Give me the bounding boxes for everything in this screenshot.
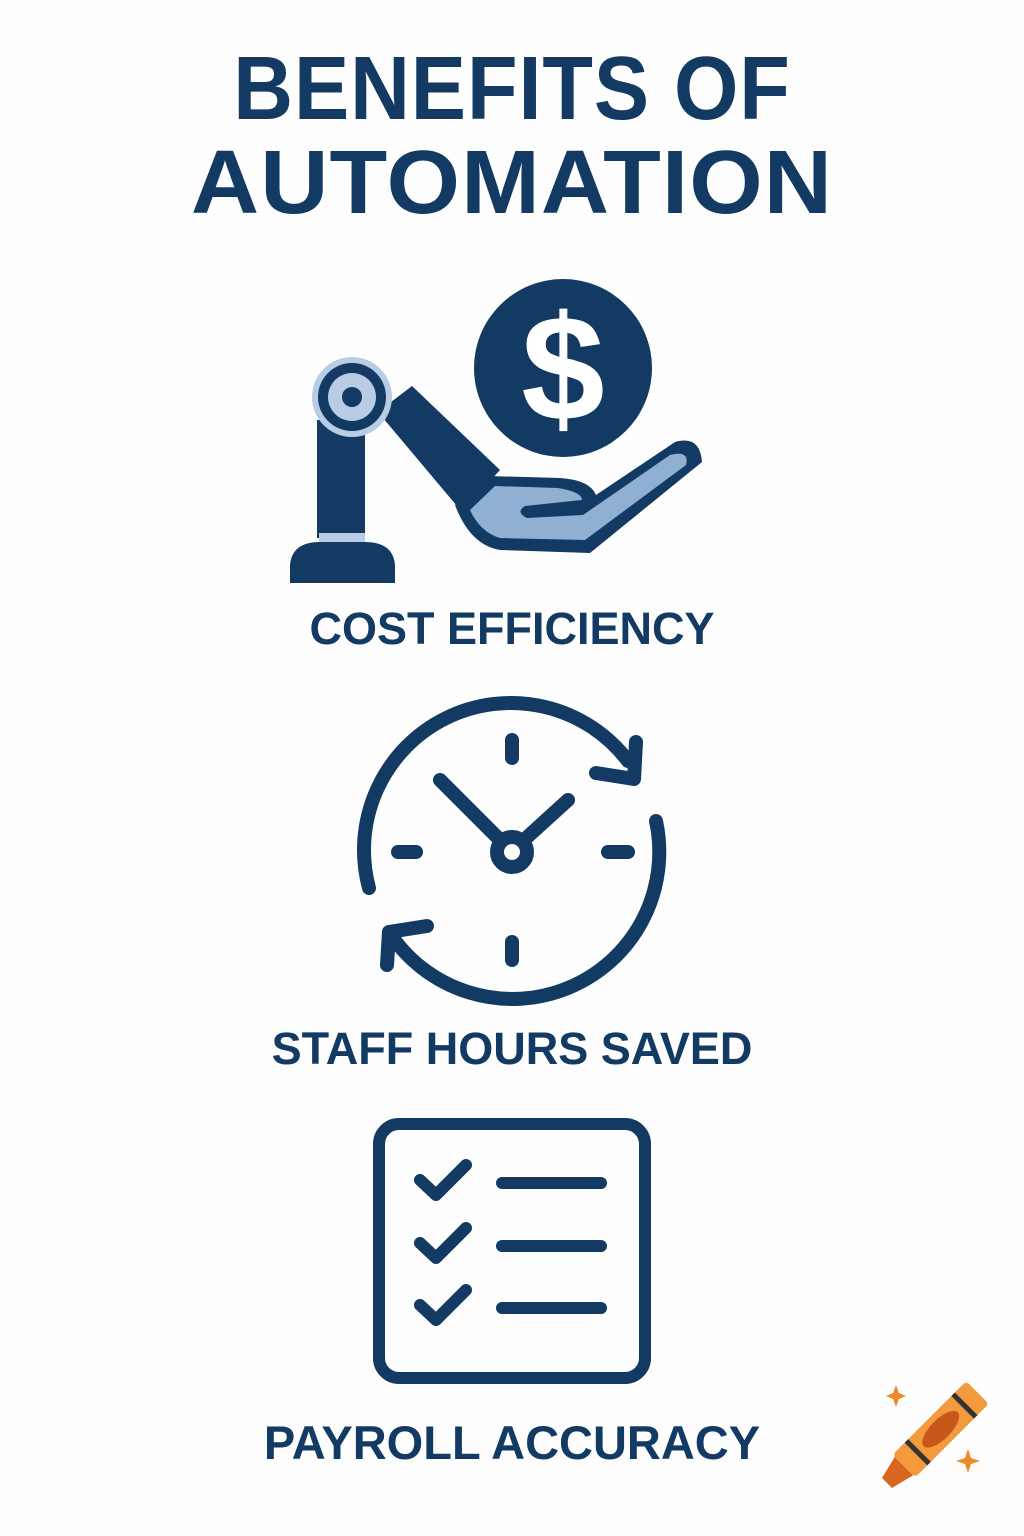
title (191, 39, 833, 233)
icon: clock with arrows (357, 696, 666, 1006)
label: payroll accuracy: PAYROLL ACCURACY (264, 1416, 760, 1469)
title: AUTOMATION (191, 133, 833, 233)
title: BENEFITS OF (233, 39, 791, 139)
icon: robot arm with coin (290, 279, 702, 583)
label: cost efficiency: COST EFFICIENCY (309, 603, 715, 654)
icon: robot arm with coin: $ (521, 284, 605, 452)
icon: crayon logo (882, 1382, 988, 1488)
label: staff hours saved: STAFF HOURS SAVED (272, 1023, 752, 1074)
